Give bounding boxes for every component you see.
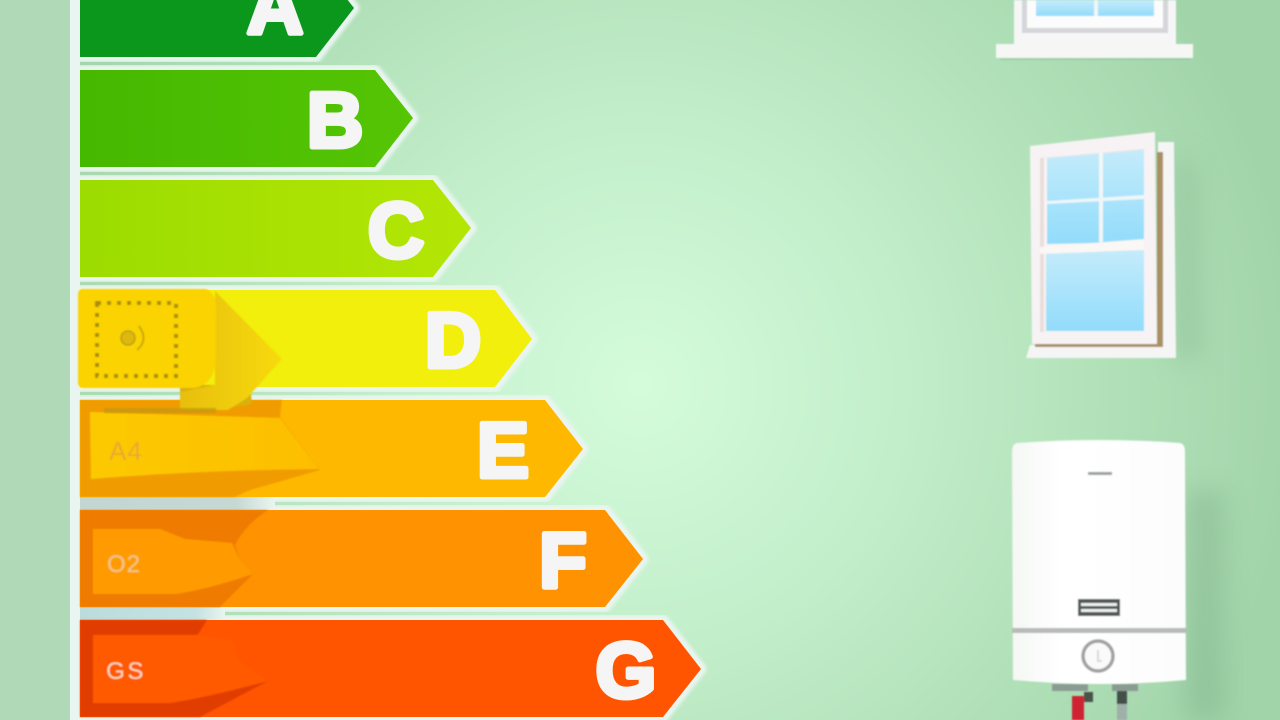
rating bar D: D <box>425 296 481 384</box>
rating bar G: G <box>596 626 656 714</box>
white vertical axis line <box>70 0 80 720</box>
overlay shape on D with seal <box>78 289 282 413</box>
overlay shape on F with label <box>80 510 268 607</box>
icon: dotted square seal <box>97 303 176 376</box>
rating bar B <box>80 70 413 167</box>
rating bar C <box>80 180 471 277</box>
rating bar E: E <box>477 406 529 494</box>
rating bar D <box>80 290 532 387</box>
boiler body <box>1012 440 1186 684</box>
shadow gap band under E overlay <box>80 497 275 510</box>
window shadow <box>1176 150 1200 360</box>
overlay shape on G with label <box>80 620 268 717</box>
label: A4: A4 <box>109 436 143 466</box>
icon: open window (middle) <box>1026 132 1200 360</box>
rating bar C: C <box>368 186 424 274</box>
left wall strip <box>0 0 70 720</box>
rating bar A <box>80 0 354 57</box>
icon: boiler <box>1012 440 1225 720</box>
overlay shape on E with label <box>80 400 320 497</box>
shadow gap band under F overlay <box>80 607 225 620</box>
icon: closed window (top) <box>996 0 1193 60</box>
dotted caption strip <box>104 408 216 413</box>
rating bar F: F <box>539 516 587 604</box>
rating bar B: B <box>307 76 363 164</box>
label: O2: O2 <box>107 551 141 578</box>
rating bar G <box>80 620 701 717</box>
rating bar E <box>80 400 583 497</box>
label: GS: GS <box>106 658 146 685</box>
rating bar F <box>80 510 643 607</box>
boiler shadow <box>1185 490 1225 720</box>
boiler pipes <box>1052 684 1138 720</box>
